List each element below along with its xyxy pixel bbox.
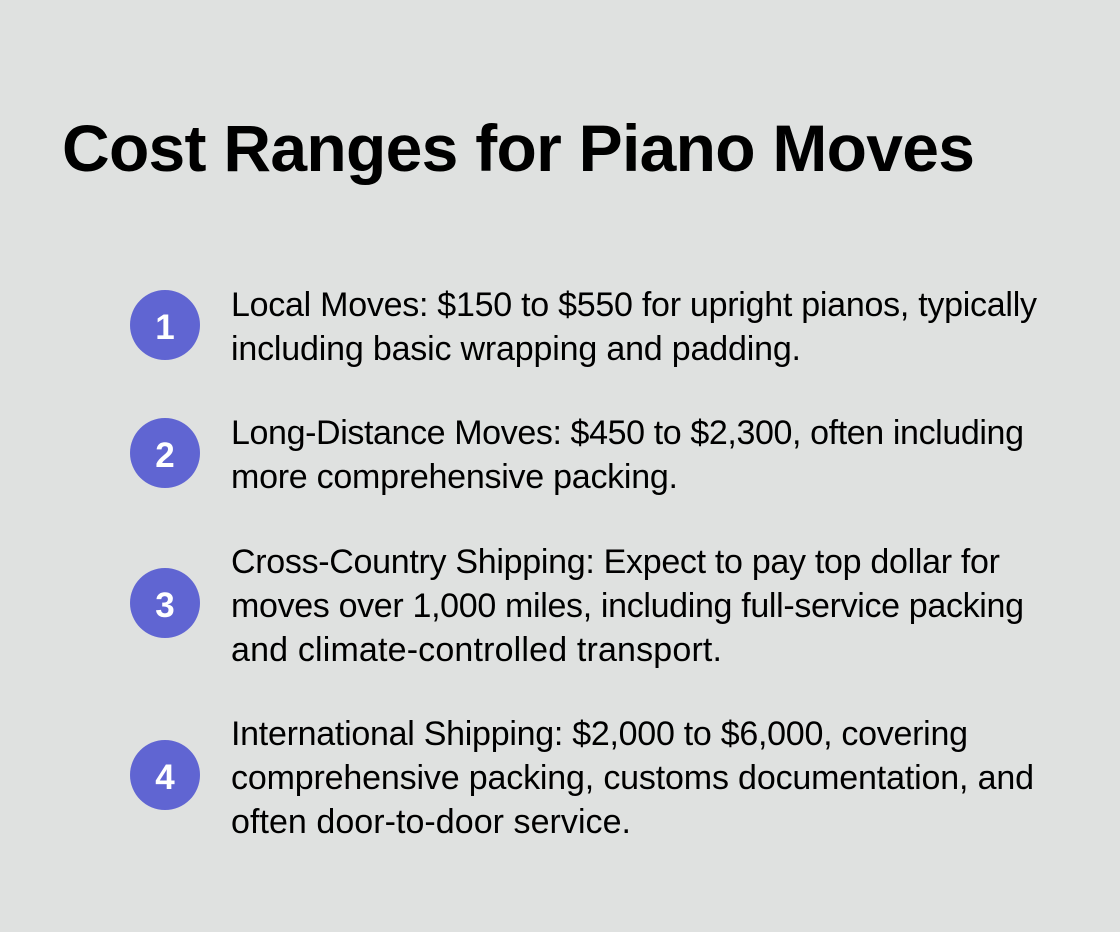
title: Cost Ranges for Piano Moves xyxy=(62,111,975,185)
text: cross-country shipping xyxy=(231,543,1024,669)
icon: number 4 badge: 4 xyxy=(155,758,175,797)
text: local moves: including basic wrapping and padding. xyxy=(231,330,801,368)
text: international shipping: International Shipping: $2,000 to $6,000, covering xyxy=(231,715,968,753)
text: international shipping: comprehensive packing, customs documentation, and xyxy=(231,759,1034,797)
text: cross-country shipping: Cross-Country Shipping: Expect to pay top dollar for xyxy=(231,543,1000,581)
icon: number 3 badge: 3 xyxy=(155,586,175,625)
icon: number 1 badge: 1 xyxy=(155,308,175,347)
text: local moves: Local Moves: $150 to $550 for upright pianos, typically xyxy=(231,286,1037,324)
text: cross-country shipping: and climate-controlled transport. xyxy=(231,631,722,669)
icon: number 2 badge: 2 xyxy=(155,436,175,475)
list item 1 xyxy=(130,286,1037,368)
text: long-distance moves: more comprehensive packing. xyxy=(231,458,678,496)
text: long-distance moves xyxy=(231,414,1024,496)
text: long-distance moves: Long-Distance Moves: $450 to $2,300, often including xyxy=(231,414,1024,452)
list item 3 xyxy=(130,543,1024,669)
text: international shipping xyxy=(231,715,1034,841)
text: local moves xyxy=(231,286,1037,368)
icon: number 2 badge xyxy=(130,418,200,488)
text: international shipping: often door-to-door service. xyxy=(231,803,631,841)
icon: number 1 badge xyxy=(130,290,200,360)
icon: number 3 badge xyxy=(130,568,200,638)
text: cross-country shipping: moves over 1,000 miles, including full-service packing xyxy=(231,587,1024,625)
icon: number 4 badge xyxy=(130,740,200,810)
list item 2 xyxy=(130,414,1024,496)
list item 4 xyxy=(130,715,1034,841)
